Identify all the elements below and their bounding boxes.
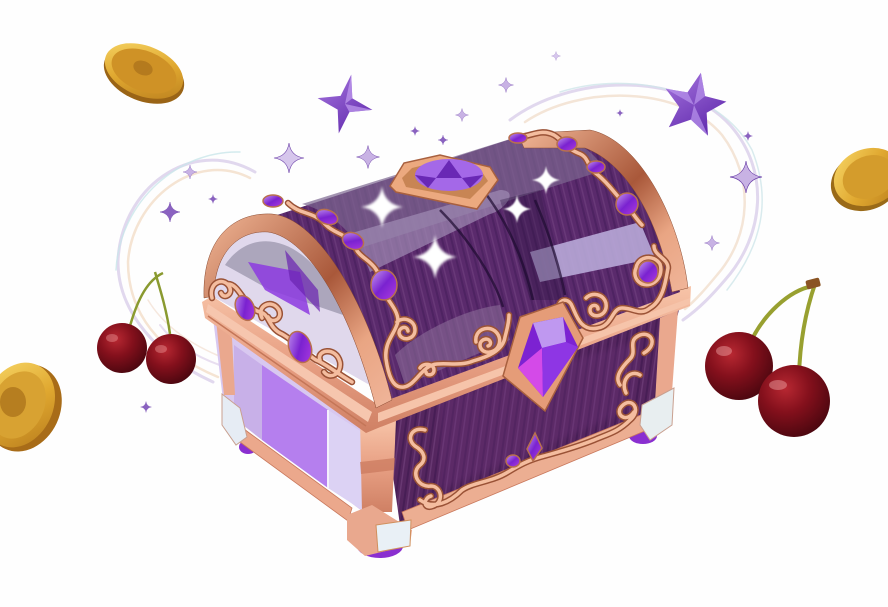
coin: right edge [822, 138, 888, 221]
chest gold scrollwork [211, 132, 668, 507]
swirl: right magic ring [510, 83, 762, 320]
chest left glass panel [213, 318, 366, 514]
treasure chest [202, 130, 691, 558]
chest white sparkles [361, 166, 560, 279]
chest corner glass blocks [222, 388, 674, 556]
chest small amethyst gems [231, 133, 658, 467]
coin: bottom left [0, 351, 76, 464]
chest lid left arch band [204, 214, 392, 408]
chest feet [239, 428, 657, 558]
star: large purple four-point [311, 69, 379, 139]
chest rim band [202, 286, 691, 433]
chest lid wood top [274, 134, 680, 400]
cherries: right pair [705, 277, 830, 437]
small outline stars [140, 52, 762, 412]
coin: top left [95, 32, 193, 115]
swirl: left magic ring [116, 152, 310, 387]
chest front latch gem [503, 302, 583, 411]
chest corner posts [216, 310, 678, 512]
chest top heart gem plate [390, 155, 498, 209]
chest front wood panel [385, 305, 680, 525]
chest lid left glass end [212, 228, 382, 392]
cherries: left pair [97, 272, 196, 384]
star: large purple five-point [658, 66, 731, 138]
chest lid right arch band [518, 130, 688, 292]
chest rose-gold bottom rails [226, 412, 652, 530]
